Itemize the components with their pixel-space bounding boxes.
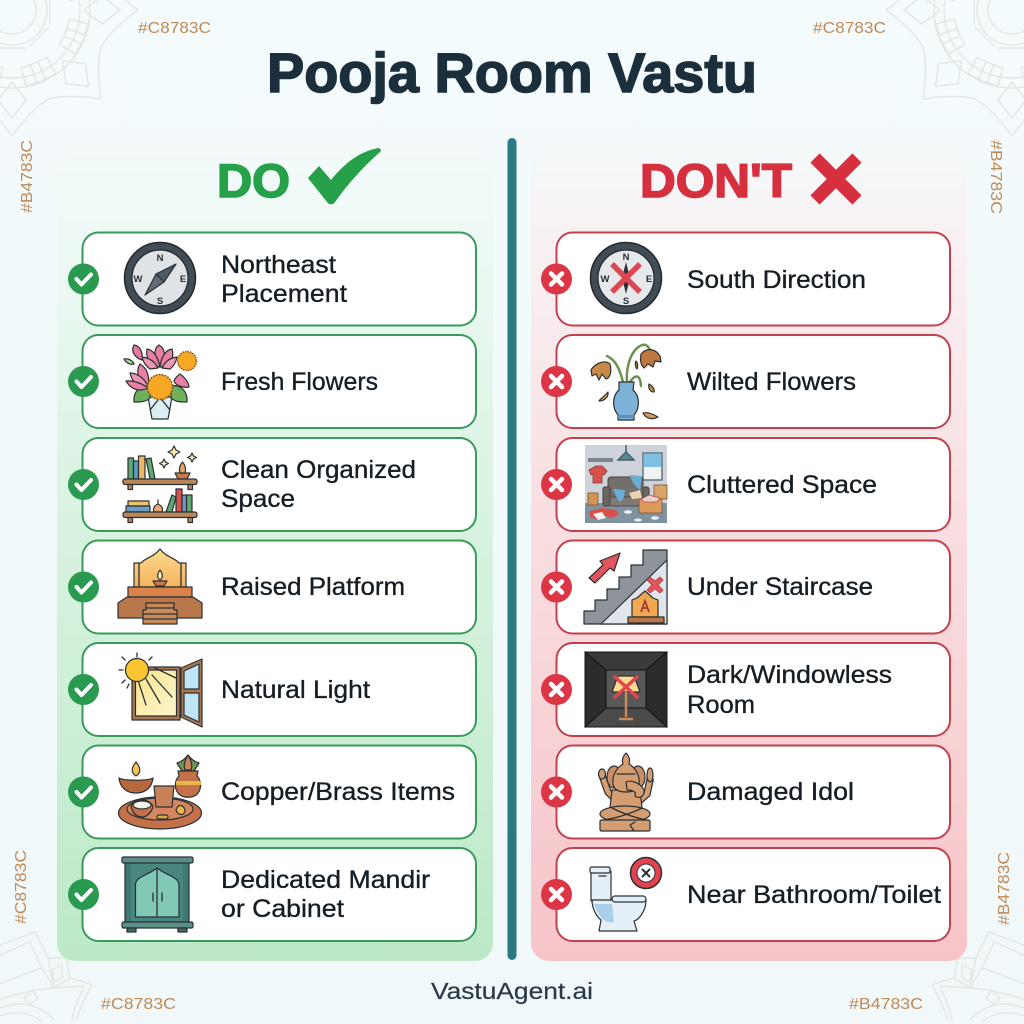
badge: cross [541,572,572,602]
card: South Direction [541,232,950,326]
corner colour labels: #B4783C [849,996,923,1013]
badge: check [68,674,99,705]
badge: check [68,469,99,500]
footer brand: VastuAgent.ai [431,978,593,1004]
label: Dedicated Mandir [221,866,430,894]
corner colour labels: #B4783C [987,140,1004,214]
icon: toilet with warning cross [590,858,662,931]
icon: large cross [815,158,857,200]
card: Northeast Placement [68,232,476,326]
corner colour labels: #B4783C [996,852,1013,925]
label: Dark/Windowless [687,661,892,689]
label: Damaged Idol [687,778,854,806]
label: Raised Platform [221,573,405,601]
icon: wilted flowers in vase [591,345,661,420]
card: Near Bathroom/Toilet [541,848,950,941]
label: Near Bathroom/Toilet [687,881,941,909]
label: Space [221,485,295,513]
label: Under Staircase [687,573,873,601]
icon: compass crossed out: N [623,252,630,263]
icon: compass [124,242,196,314]
card: Raised Platform [68,540,476,634]
panel: DO background [57,150,493,961]
card: Fresh Flowers [68,335,476,428]
icon: copper and brass items [118,755,202,829]
badge: check [68,366,99,397]
icon: compass crossed out: W [601,274,610,285]
corner colour labels: #C8783C [813,20,886,37]
badge: check [68,264,99,294]
card: Dedicated Mandir or Cabinet [68,848,476,941]
heading: DO [217,148,381,207]
icon: raised platform shrine [118,549,202,624]
icon: large check mark [308,148,381,204]
icon: compass crossed out: E [646,274,652,285]
corner colour labels: #C8783C [101,996,176,1013]
card: Clean Organized Space [68,438,476,531]
icon: tidy shelves [123,446,197,522]
label: Cluttered Space [687,471,877,499]
label: Clean Organized [221,456,416,484]
label: Natural Light [221,676,370,704]
heading: DO: DO [217,154,290,207]
corner colour labels: #C8783C [138,20,211,37]
icon: sun through window [119,653,202,727]
panel: DON'T background [531,150,967,961]
icon: compass: E [180,274,186,285]
card: Copper/Brass Items [68,746,476,838]
label: Placement [221,280,347,308]
label: Northeast [221,251,336,279]
label: Fresh Flowers [221,368,378,396]
badge: cross [541,776,572,808]
icon: compass crossed out: S [623,296,629,307]
label: Room [687,691,755,719]
badge: check [68,776,99,808]
heading: DON'T [640,154,857,207]
corner colour labels: #B4783C [19,140,36,213]
badge: check [68,572,99,602]
badge: cross [541,366,572,397]
icon: compass: S [157,296,163,307]
label: Wilted Flowers [687,368,856,396]
icon: damaged Ganesha idol [598,753,653,831]
title: Pooja Room Vastu [267,41,757,104]
card: Dark/Windowless Room [541,643,950,736]
badge: cross [541,674,572,705]
icon: dark room with crossed lamp [585,652,667,727]
icon: cluttered room [585,445,667,523]
icon: fresh flowers in vase [124,345,196,419]
badge: check [68,879,99,910]
card: Natural Light [68,643,476,736]
icon: compass: N [157,253,164,264]
badge: cross [541,469,572,500]
badge: cross [541,264,572,294]
heading: DON'T: DON'T [640,154,792,207]
label: Copper/Brass Items [221,778,455,806]
badge: cross [541,879,572,910]
corner colour labels: #C8783C [13,850,30,924]
label: South Direction [687,266,866,294]
card: Damaged Idol [541,746,950,838]
card: Wilted Flowers [541,335,950,428]
label: or Cabinet [221,895,344,923]
card: Cluttered Space [541,438,950,531]
icon: compass crossed out [590,242,662,314]
icon: compass: W [134,274,143,285]
card: Under Staircase [541,540,950,634]
icon: mandir cabinet [122,857,193,932]
icon: shrine under staircase [584,550,667,624]
center divider [508,138,516,960]
